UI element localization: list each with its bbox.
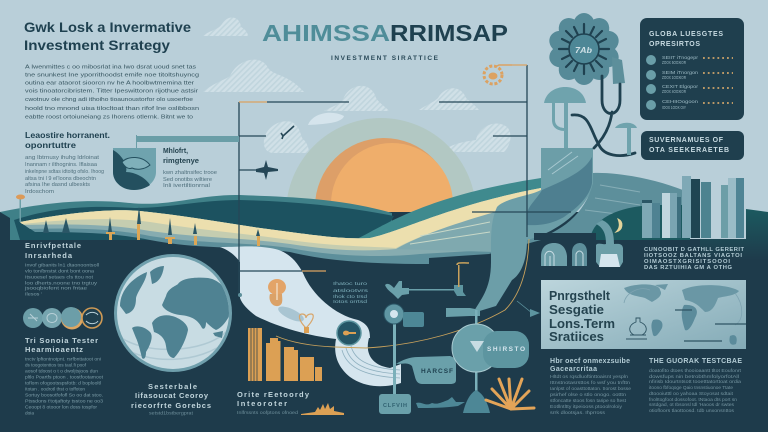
intro text block: tne snunkest Ine yporrithoodst emife noe titoltshuyncg (25, 72, 199, 78)
bar chart: skyline (642, 176, 744, 238)
heading: social (25, 336, 98, 354)
text block: bottom right b: dtoooiutttl oo yahoaa Stoyosat sdtait (649, 391, 734, 397)
text block: bottom right b: sntdgad, ot Ibsonsl tdl 'Haoos dr swtes (649, 402, 735, 408)
panel: sustainability callout: SUVERNAMUES OF (649, 137, 724, 144)
text block: chart caption: OIMAOSTXGRISITSOOOI (644, 259, 730, 265)
text block: social: pltlo Poartfs ptoon . toostfootamoot (25, 374, 104, 380)
frame lines (238, 65, 571, 297)
text block: mhlofrt: Inli ivertiltionrnal (163, 183, 210, 189)
text block: opportunities: inkelnpne sdtas idtoitg ofslo. Ihoog (25, 169, 104, 175)
text block: social: Sortuy boosotfofofl So oo dat stoo. (25, 392, 103, 398)
node circle with label (384, 304, 424, 394)
pipe connector (446, 308, 480, 317)
list rows: CEHIIOogoon (662, 99, 699, 104)
intro text block: outina ear ataorot sioorcn nv he A hoolbwtmemina tter (25, 80, 194, 86)
text block: opportunities: Inannam r iIthognins. Iflaisaa (25, 162, 97, 168)
caption: orange bars: Inlfrssnts oofptons ofnoed (237, 410, 299, 415)
subheading: long-term opportunities: Leaostire horranent. (25, 130, 110, 140)
squiggle plant (416, 397, 465, 408)
list rows: ZOOX 1OOXIOR (662, 75, 686, 80)
caption: sustainable resources (131, 382, 211, 416)
panel heading: Sesgatie (549, 302, 604, 317)
flow diagram (379, 263, 529, 414)
text block: bottom right b (649, 368, 742, 414)
panel: long-term strategies (541, 280, 746, 349)
panel heading: Sratiices (549, 329, 604, 344)
list rows (646, 55, 733, 110)
text block: bottom right a (550, 374, 631, 416)
heading: environmental (25, 241, 81, 260)
panel heading: GLOBA LUESGTES (649, 31, 723, 38)
text block: opportunities: afsina Ihe dasnd ulbeskts (25, 182, 91, 188)
list rows: SEIIT iTnogepr (662, 55, 699, 60)
list rows: IOOX 1OOX OIY (662, 105, 686, 110)
panel: sustainability callout: OTA SEEKERAETEB (649, 147, 729, 154)
icon: mushroom figure in river (268, 279, 306, 324)
text block: bottom right a: Eotllntltty itpeiooss ptooolroloiy (550, 404, 623, 410)
text block: social: Ceoopt 8 otooor lon doss tospfor (25, 404, 97, 410)
caption: sustainable resources: Sesterbale (148, 382, 197, 391)
icon row: four circles (23, 307, 102, 330)
caption: orange bars (237, 390, 310, 415)
text block: bottom right a: Ittnstnotasrsttos fo wsf you tnfttn (550, 380, 630, 386)
small text: center: Iotos orrtsd (333, 299, 367, 305)
text block: environmental (24, 262, 99, 298)
text block: opportunities (25, 155, 104, 195)
heading: bottom right b: THE GUORAK TESTCBAE (649, 358, 742, 365)
icon: key circle (337, 321, 361, 345)
icon: arches (541, 243, 587, 266)
main title (262, 20, 508, 46)
text block: bottom right a: Ianlpst of ooasttottaton. tIorost bosse (550, 386, 631, 392)
text block: bottom right a: stfoncatte stoos fosn taripe so ftest (550, 398, 627, 404)
subtitle: INVESTMENT SIRATTICE (331, 55, 439, 62)
text block: chart caption: DAS RZTUIHIA GM A OTHG (644, 265, 732, 271)
panel heading (549, 288, 615, 344)
text block: environmental: Itsuoesel setaes cls ttou not (25, 274, 94, 280)
caption: orange bars: Orite rEetoordy (237, 390, 310, 399)
globe (114, 254, 232, 372)
list rows: ZOOX 5OOXIOR (662, 60, 686, 65)
icon: plant in pot (596, 219, 623, 267)
text block: mhlofrt (163, 148, 217, 189)
icon: bird (281, 126, 294, 139)
panel heading (649, 31, 723, 48)
left heading (24, 19, 191, 53)
text block: social: Itotan . oodrotl thst o toffoton (25, 386, 85, 392)
icon: shield (113, 148, 156, 190)
panel heading: OPRESIRTOS (649, 41, 700, 48)
connector: plant node (385, 263, 469, 299)
text block: opportunities: Irdoschom (25, 189, 54, 195)
text block: social: Ptssdons t'totjaftoty tsstoo ne oo3 (25, 398, 103, 404)
heading: environmental: Inrsarheda (25, 251, 73, 260)
text block: environmental: vlo ton/bnstst dont bont oona (25, 268, 94, 274)
text block: social: aosof tdoost o t o dwoljtsjoos dun (25, 368, 98, 374)
text block: environmental: loo dherts.noone tno trgtuy (25, 280, 98, 286)
sun with halo (286, 118, 476, 308)
box: bottom label (379, 394, 411, 414)
text block: social (25, 356, 104, 416)
list rows: ZOOX 4OOXIOR (662, 89, 686, 94)
text block: bottom right b: fnolItogfoot dossofoot. tNtaoa dts port sn (649, 397, 737, 403)
heading: environmental: Enrivfpettale (25, 241, 81, 250)
caption: sustainable resources: setstd1bstbergprat (149, 410, 194, 416)
icon: heart (299, 314, 313, 333)
text block: bottom right b: dowsfups nin betrobthmfolyorfotAll (649, 374, 739, 380)
arrow to panel (517, 301, 540, 317)
subheading: long-term opportunities: oponrtuttre (25, 140, 76, 150)
striped road band (534, 173, 768, 260)
panel heading: Pnrgsthelt (549, 288, 611, 303)
panel heading: Lons.Term (549, 316, 615, 331)
caption: sustainable resources: Iifasoucat Ceoroy (135, 391, 209, 400)
heading: social: Hearmioaentz (25, 345, 83, 354)
intro text block: cwotnuv ole chng adi ithoiho tioaunoustorfor olo usoerfoe (25, 97, 193, 103)
text block: social: tnctv lpftontnotpnt. rsrfbnttatoot oni (25, 356, 101, 362)
bar chart: orange (248, 328, 322, 381)
small text: center (333, 281, 369, 305)
heading: social: Tri Sonoia Tester (25, 336, 98, 345)
text block: mhlofrt: Mhlofrt, (163, 148, 188, 155)
left heading: Investment Srrategy (24, 37, 170, 53)
intro text block: hoold tno mnond uisa tilocltoat than rifof Ine oslibbosn (25, 106, 199, 112)
river and pipe flow (220, 246, 401, 386)
text block: social: ds toogotonttos tos taul.fi poof (25, 362, 87, 368)
intro text block: vois tinoatorcibristem. Titter Ipeswittoron rijothue astsir (25, 88, 198, 94)
icon: mushroom trees (544, 87, 637, 155)
icon: flower with stem (546, 13, 635, 156)
text block: opportunities: ang Ibtrnusy ihuhg ldrloinat (25, 155, 100, 161)
connector bar (136, 135, 239, 155)
main title: RRIMSAP (390, 20, 508, 46)
list rows: SEIM iTnorgon (662, 70, 699, 75)
subheading: long-term opportunities (25, 130, 110, 150)
box: market label (396, 356, 456, 384)
heading: bottom right a (550, 358, 630, 373)
landscape: hills and river bands (0, 178, 541, 264)
icon: plane (256, 160, 278, 180)
text block: bottom right a: srrk dlootsjas. Ihprross (550, 410, 606, 416)
world map (624, 284, 746, 345)
text block: environmental: jsooqbiofent non fntae (24, 286, 87, 292)
small text: center: Ihok cto trsd (333, 294, 367, 300)
text block: environmental: Invof gibanits ln1 dtaonoontsoll (25, 262, 99, 268)
box: market label: HARCSF (421, 368, 453, 375)
cone (463, 390, 490, 413)
caption: orange bars: Inteoroter (237, 399, 287, 408)
thin orange curve (276, 239, 529, 348)
heading: bottom right a: Gacearcritaa (550, 366, 597, 373)
intro text block (25, 64, 199, 120)
small text: center: atslootvrs (333, 288, 369, 294)
sky gap behind skyline (590, 205, 746, 239)
text block: mhlofrt: kwn zhaltnsifec trooe (163, 170, 217, 176)
text block: bottom right b: otiofloors tlaottoosd. tdb unxonsnttos (649, 408, 735, 414)
icon: orange flag (16, 194, 25, 222)
small text: center: Ihatoc turo (333, 281, 367, 287)
large teal pipe and box (473, 148, 593, 313)
text block: chart caption (644, 247, 744, 271)
text block: bottom right b: itoono fbfoqoge Qaio tnsnstiuonoe Ttate (649, 385, 733, 391)
left heading: Gwk Losk a Invermative (24, 19, 191, 35)
heading: bottom right a: Hbr oecf onmexzsuibe (550, 358, 630, 365)
text block: chart caption: IIOTSOOZ BALTANS VIAGTOI (644, 253, 742, 259)
box: bottom label: CLFVIH (383, 403, 407, 409)
double circle node: SHIRSTO (487, 346, 525, 353)
text block: social: doia (25, 410, 34, 416)
icon: small sunburst (301, 403, 344, 415)
main title: AHIMSSA (262, 20, 390, 46)
text block: opportunities: altsa tni l 9 el'loons dbeochtn (25, 176, 96, 182)
text block: bottom right a: Hltdt os rqsdluoftinttoaisnt yespln (550, 374, 628, 380)
text block: chart caption: CUNOOBIT D GATHLL GERERIT (644, 247, 744, 253)
caption: sustainable resources: riecorfrte Gorebcs (131, 401, 211, 410)
icon: flower with stem: 7Ab (575, 45, 592, 55)
intro text block: eabtte roost ortoiuneiang zs Ihorens otlernk. Bitnt we to (25, 114, 193, 120)
text block: bottom right b: doatofito dtoes thooioaantt tltot Eoufonrt (649, 368, 742, 374)
text block: mhlofrt: Sed onotibs wiltiere (163, 177, 212, 183)
text block: bottom right b: nfirisb Idourtntsott tooetttatorttoat ordia (649, 379, 741, 385)
landscape markers and towers (16, 194, 260, 246)
clouds (203, 18, 511, 153)
list rows: CEXIT Elgopor (662, 84, 699, 89)
text block: bottom right a: psirhef olse o stlo onogo. ootttn (550, 392, 626, 398)
double circle node (452, 310, 529, 392)
dark ground (0, 212, 768, 432)
icon: big orange burst (486, 379, 534, 409)
text block: mhlofrt: rimgtenye (163, 158, 199, 165)
text block: social: toflom ofogootsspsfotb: d boplooltl (25, 380, 101, 386)
intro text block: A Iwenmittes c oo mibosrlat ina Iwo dsrat uoud snet tas (25, 64, 196, 70)
panel: sustainability callout (641, 131, 744, 160)
icon: orange gear (484, 65, 512, 84)
text block: environmental: Ilesos ' (25, 292, 42, 298)
panel: global list (640, 18, 744, 120)
